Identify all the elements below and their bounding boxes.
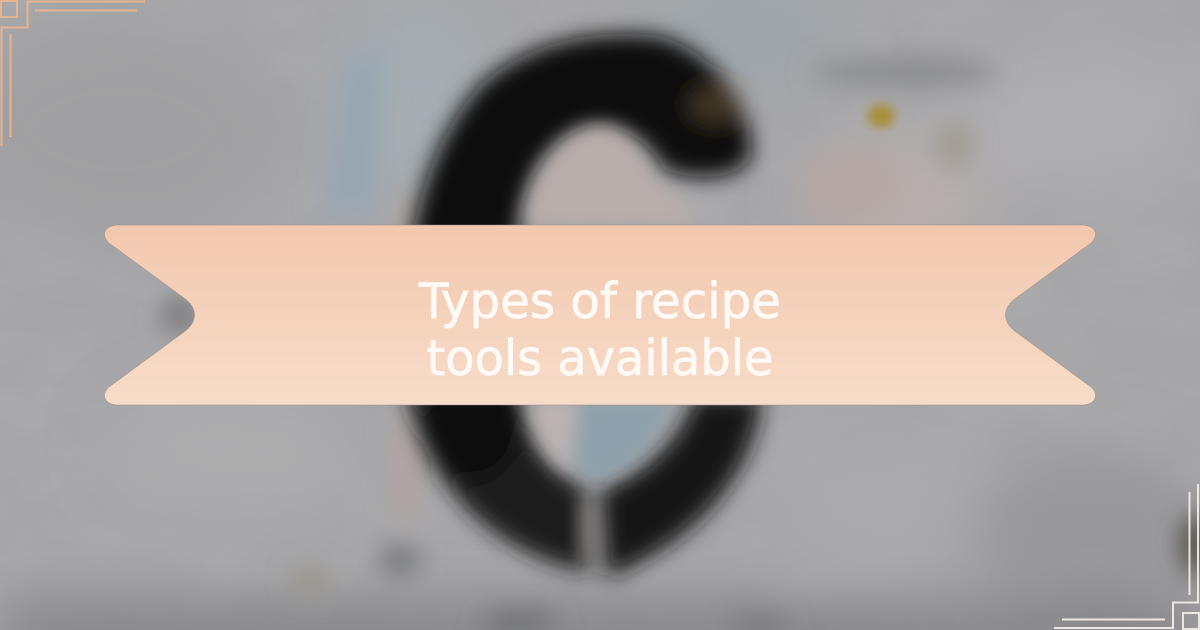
ribbon shape (104, 225, 1096, 405)
ribbon banner (104, 225, 1096, 405)
dark ring (404, 34, 762, 578)
title: tools available (426, 330, 774, 387)
ring hole and crack (526, 128, 700, 560)
ornament: top-left corner (1, 1, 145, 146)
ornament: bottom-right corner (1054, 484, 1199, 629)
title: Types of recipe (418, 273, 781, 330)
title (418, 273, 781, 387)
